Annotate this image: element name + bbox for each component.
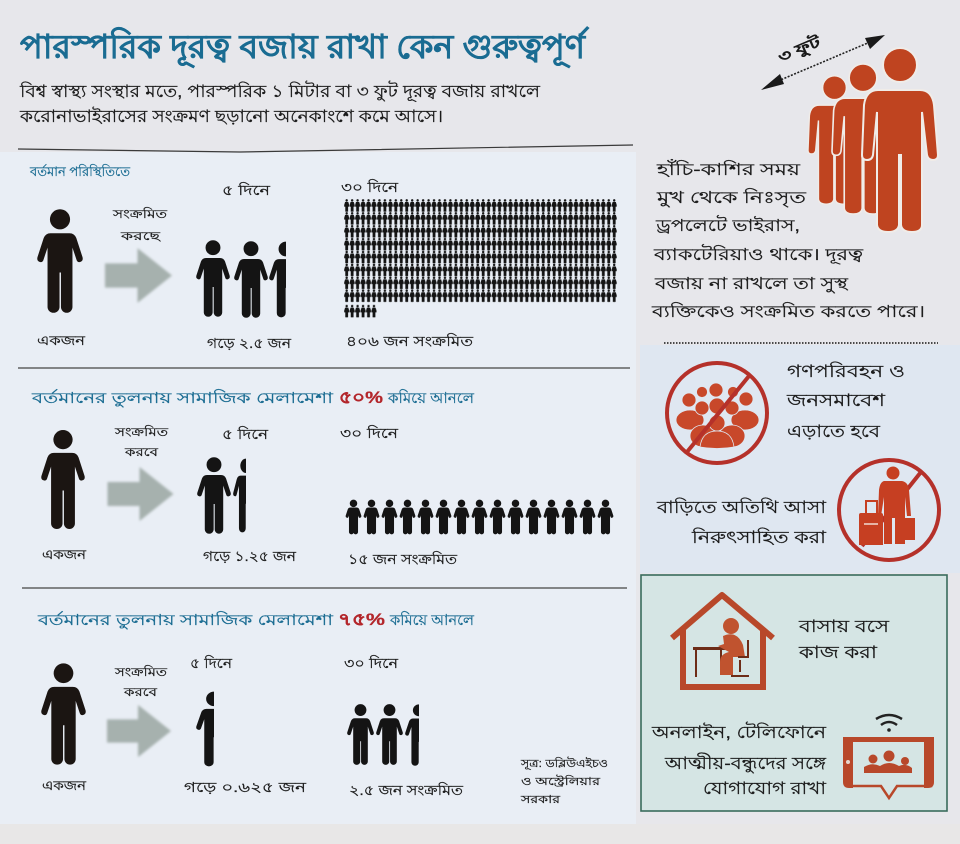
label: will infect: করবে: [123, 685, 157, 699]
panel: current situation: [29, 164, 617, 351]
source note: [520, 757, 608, 806]
heading: 50 percent: কমিয়ে আনলে: [387, 389, 475, 407]
icon: 3 feet distance arrow: ৩ ফুট: [775, 32, 824, 67]
text: droplet explanation: বজায় না রাখলে তা সুস্থ: [654, 275, 849, 293]
text: droplet explanation: মুখ থেকে নিঃসৃত: [656, 187, 807, 208]
title: পারস্পরিক দূরত্ব বজায় রাখা কেন গুরুত্বপূর্ণ: [20, 26, 589, 68]
text: droplet explanation: হাঁচি-কাশির সময়: [656, 159, 802, 179]
heading: 75 percent: [37, 610, 475, 629]
text: droplet explanation: ব্যক্তিকেও সংক্রমিত করতে পারে।: [651, 301, 925, 321]
text: stay in touch online: [651, 722, 827, 798]
panel: green stay home box: [641, 575, 947, 811]
text: avoid public transport: জনসমাবেশ: [786, 391, 886, 410]
text: droplet explanation: [651, 159, 925, 321]
label: average 2.5: গড়ে ২.৫ জন: [207, 335, 292, 351]
icon: three red people: [808, 48, 938, 232]
label: will infect: করবে: [124, 445, 158, 459]
arrow: [108, 467, 174, 521]
icon: no guests: [839, 460, 939, 560]
icon: 0.625 person: [196, 692, 214, 766]
label: will infect: সংক্রমিত: [114, 425, 169, 439]
label: 2.5 infected: ২.৫ জন সংক্রমিত: [349, 782, 464, 798]
panel: 50 percent reduction: [31, 388, 613, 567]
text: avoid public transport: এড়াতে হবে: [787, 422, 881, 441]
label: average 0.625: গড়ে ০.৬২৫ জন: [184, 779, 307, 795]
heading: 75 percent: ৭৫%: [338, 610, 385, 629]
text: work from home: কাজ করা: [798, 643, 878, 662]
text: droplet explanation: ড্রপলেটে ভাইরাস,: [655, 215, 800, 235]
text: stay in touch online: আত্মীয়-বন্ধুদের সঙ্গে: [664, 753, 827, 773]
heading: 75 percent: বর্তমানের তুলনায় সামাজিক মেলামেশা: [37, 611, 334, 629]
text: discourage guests: নিরুৎসাহিত করা: [691, 527, 827, 547]
heading: 75 percent: কমিয়ে আনলে: [389, 611, 475, 629]
icon: home office: [672, 595, 773, 687]
icon: video call phone: [843, 715, 934, 798]
label: infecting: সংক্রমিত: [112, 207, 168, 221]
intro text: করোনাভাইরাসের সংক্রমণ ছড়ানো অনেকাংশে কমে আসে।: [19, 107, 443, 126]
heading: 50 percent: ৫০%: [339, 388, 383, 407]
intro text: বিশ্ব স্বাস্থ্য সংস্থার মতে, পারস্পরিক ১ মিটার বা ৩ ফুট দূরত্ব বজায় রাখলে: [19, 81, 540, 102]
label: will infect: [114, 665, 168, 699]
panel background: left scenarios: [0, 152, 636, 824]
label: average 1.25: গড়ে ১.২৫ জন: [203, 548, 297, 564]
text: stay in touch online: অনলাইন, টেলিফোনে: [651, 722, 827, 742]
label: will infect: সংক্রমিত: [114, 665, 168, 679]
chart: 15 people row: [346, 500, 613, 534]
bottom paper strip: [0, 824, 960, 844]
chart: 406 people grid: [344, 199, 617, 318]
source note: ও অস্ট্রেলিয়ার: [521, 775, 601, 788]
icon: 2.5 people: [347, 704, 433, 766]
text: droplet explanation: ব্যাকটেরিয়াও থাকে। দূরত্ব: [653, 244, 865, 265]
source note: সরকার: [520, 794, 561, 806]
label: one person: একজন: [37, 333, 85, 348]
text: discourage guests: [656, 497, 827, 547]
label: one person: একজন: [42, 778, 86, 793]
panel: 75 percent reduction: [37, 610, 608, 806]
icon: 2.5 people: [196, 240, 303, 318]
label: infecting: [112, 207, 168, 243]
heading: 50 percent: বর্তমানের তুলনায় সামাজিক মেলামেশা: [31, 389, 334, 407]
arrow: [105, 248, 172, 303]
label: 15 infected: ১৫ জন সংক্রমিত: [348, 551, 458, 567]
text: avoid public transport: গণপরিবহন ও: [787, 361, 905, 381]
icon: 3 feet distance arrow: [761, 32, 885, 90]
text: avoid public transport: [786, 361, 905, 441]
arrow: [107, 705, 171, 757]
label: will infect: [114, 425, 169, 459]
heading: 50 percent: [31, 388, 475, 407]
label: 406 infected: ৪০৬ জন সংক্রমিত: [346, 333, 474, 349]
text: work from home: [798, 617, 890, 662]
source note: সূত্র: ডব্লিউএইচও: [520, 757, 608, 770]
column label: 5 days: ৫ দিনে: [222, 426, 269, 442]
column label: 30 days: ৩০ দিনে: [341, 179, 399, 195]
icon: 1.25 people: [197, 457, 259, 534]
label: infecting: করছে: [120, 229, 161, 243]
icon: no crowds: [667, 363, 767, 463]
text: work from home: বাসায় বসে: [798, 617, 890, 636]
column label: 30 days: ৩০ দিনে: [344, 655, 399, 671]
column label: 5 days: ৫ দিনে: [190, 655, 233, 671]
text: discourage guests: বাড়িতে অতিথি আসা: [656, 497, 827, 517]
icon: one person: [41, 430, 85, 529]
icon: one person: [37, 209, 83, 313]
intro text: [19, 81, 540, 126]
column label: 5 days: ৫ দিনে: [222, 182, 271, 198]
label: one person: একজন: [42, 547, 86, 562]
icon: one person: [41, 663, 86, 765]
heading: current situation: বর্তমান পরিস্থিতিতে: [29, 164, 130, 179]
panel background: right avoidance list: [640, 345, 960, 573]
text: stay in touch online: যোগাযোগ রাখা: [703, 779, 827, 798]
column label: 30 days: ৩০ দিনে: [340, 425, 399, 441]
